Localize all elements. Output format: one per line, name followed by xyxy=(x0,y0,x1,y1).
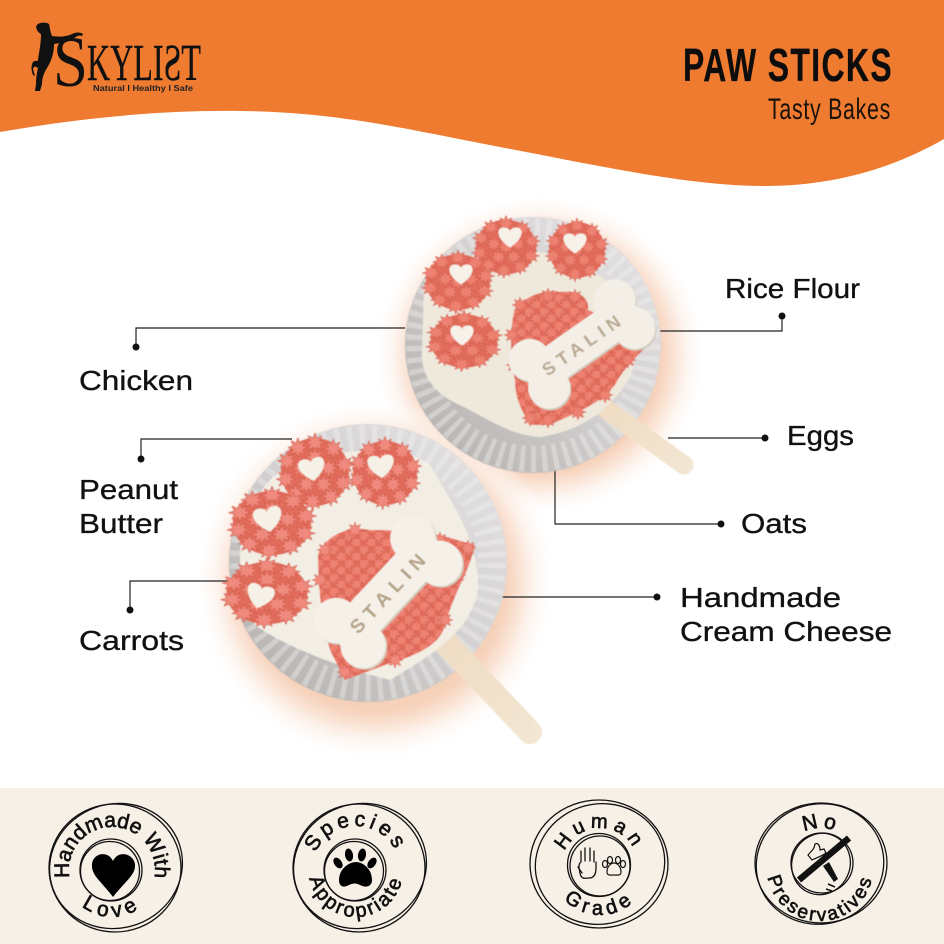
bone text: STALIN xyxy=(538,310,627,380)
shadow: bottom cake xyxy=(193,398,557,762)
sketch rings xyxy=(276,785,444,944)
frosting toes xyxy=(221,433,422,629)
paper plate xyxy=(229,424,507,702)
leader: oats xyxy=(555,462,724,528)
logo swirl S: S xyxy=(53,22,88,102)
leader: rice flour xyxy=(660,312,786,331)
logo xyxy=(32,22,201,102)
logo wordmark: KYLIƧT xyxy=(87,35,201,92)
badge: handmade with love xyxy=(48,802,184,933)
bone text: STALIN xyxy=(346,548,433,638)
sketch rings xyxy=(522,789,678,939)
cake base xyxy=(240,451,478,680)
subtitle: Tasty Bakes xyxy=(768,93,891,126)
icon: heart xyxy=(92,854,135,897)
icon: dog silhouette xyxy=(32,23,83,91)
footer panel xyxy=(0,788,944,944)
leader: cream cheese xyxy=(495,594,660,600)
curved text bottom: Preservatives xyxy=(767,874,872,922)
top cake xyxy=(405,216,684,473)
curved text bottom: Grade xyxy=(566,891,631,916)
icon: hand xyxy=(578,848,596,878)
curved text top: No xyxy=(802,814,836,831)
sketch rings xyxy=(32,785,200,944)
icon: crossed dropper xyxy=(799,838,849,891)
header banner xyxy=(0,0,944,186)
labels xyxy=(79,273,892,656)
curved text top: Handmade With xyxy=(54,814,171,878)
paper plate xyxy=(405,217,661,473)
label: peanut butter xyxy=(79,474,178,539)
label: peanut butter: Butter xyxy=(79,508,163,539)
label: handmade cream cheese xyxy=(680,582,892,647)
cake base xyxy=(422,249,635,437)
curved text bottom: Appropriate xyxy=(308,878,402,922)
sketch rings xyxy=(743,789,897,939)
stick xyxy=(443,640,530,732)
curved text top: Human xyxy=(554,816,640,850)
icon: paw xyxy=(331,848,379,887)
hearts xyxy=(449,228,587,346)
icon: small paw xyxy=(602,856,626,875)
leader lines xyxy=(126,312,786,614)
curved text top: Species xyxy=(304,814,403,850)
bone biscuit xyxy=(500,271,665,419)
stick xyxy=(606,409,684,465)
shadow: top cake xyxy=(372,193,708,517)
label: peanut butter: Peanut xyxy=(79,474,178,505)
leader: eggs xyxy=(668,434,768,442)
label: oats: Oats xyxy=(741,508,807,539)
leader: peanut butter xyxy=(138,439,292,462)
label: eggs: Eggs xyxy=(787,420,854,451)
bone biscuit xyxy=(304,506,473,679)
label: handmade cream cheese: Handmade xyxy=(680,582,841,613)
logo tagline: Natural I Healthy I Safe xyxy=(93,84,194,93)
bottom cake xyxy=(221,424,530,732)
leader: carrots xyxy=(126,581,230,614)
label: handmade cream cheese: Cream Cheese xyxy=(680,616,892,647)
label: carrots: Carrots xyxy=(79,625,184,656)
label: chicken: Chicken xyxy=(79,365,193,396)
frosting pad xyxy=(312,522,476,680)
badge: species appropriate xyxy=(292,802,428,933)
label: rice flour: Rice Flour xyxy=(725,273,860,304)
frosting pad xyxy=(504,288,652,428)
badge: human grade xyxy=(529,799,669,929)
frosting toes xyxy=(421,216,609,372)
leader: chicken xyxy=(132,328,405,350)
badge: no preservatives xyxy=(754,802,888,925)
curved text bottom: Love xyxy=(82,894,136,918)
hearts xyxy=(243,454,395,612)
